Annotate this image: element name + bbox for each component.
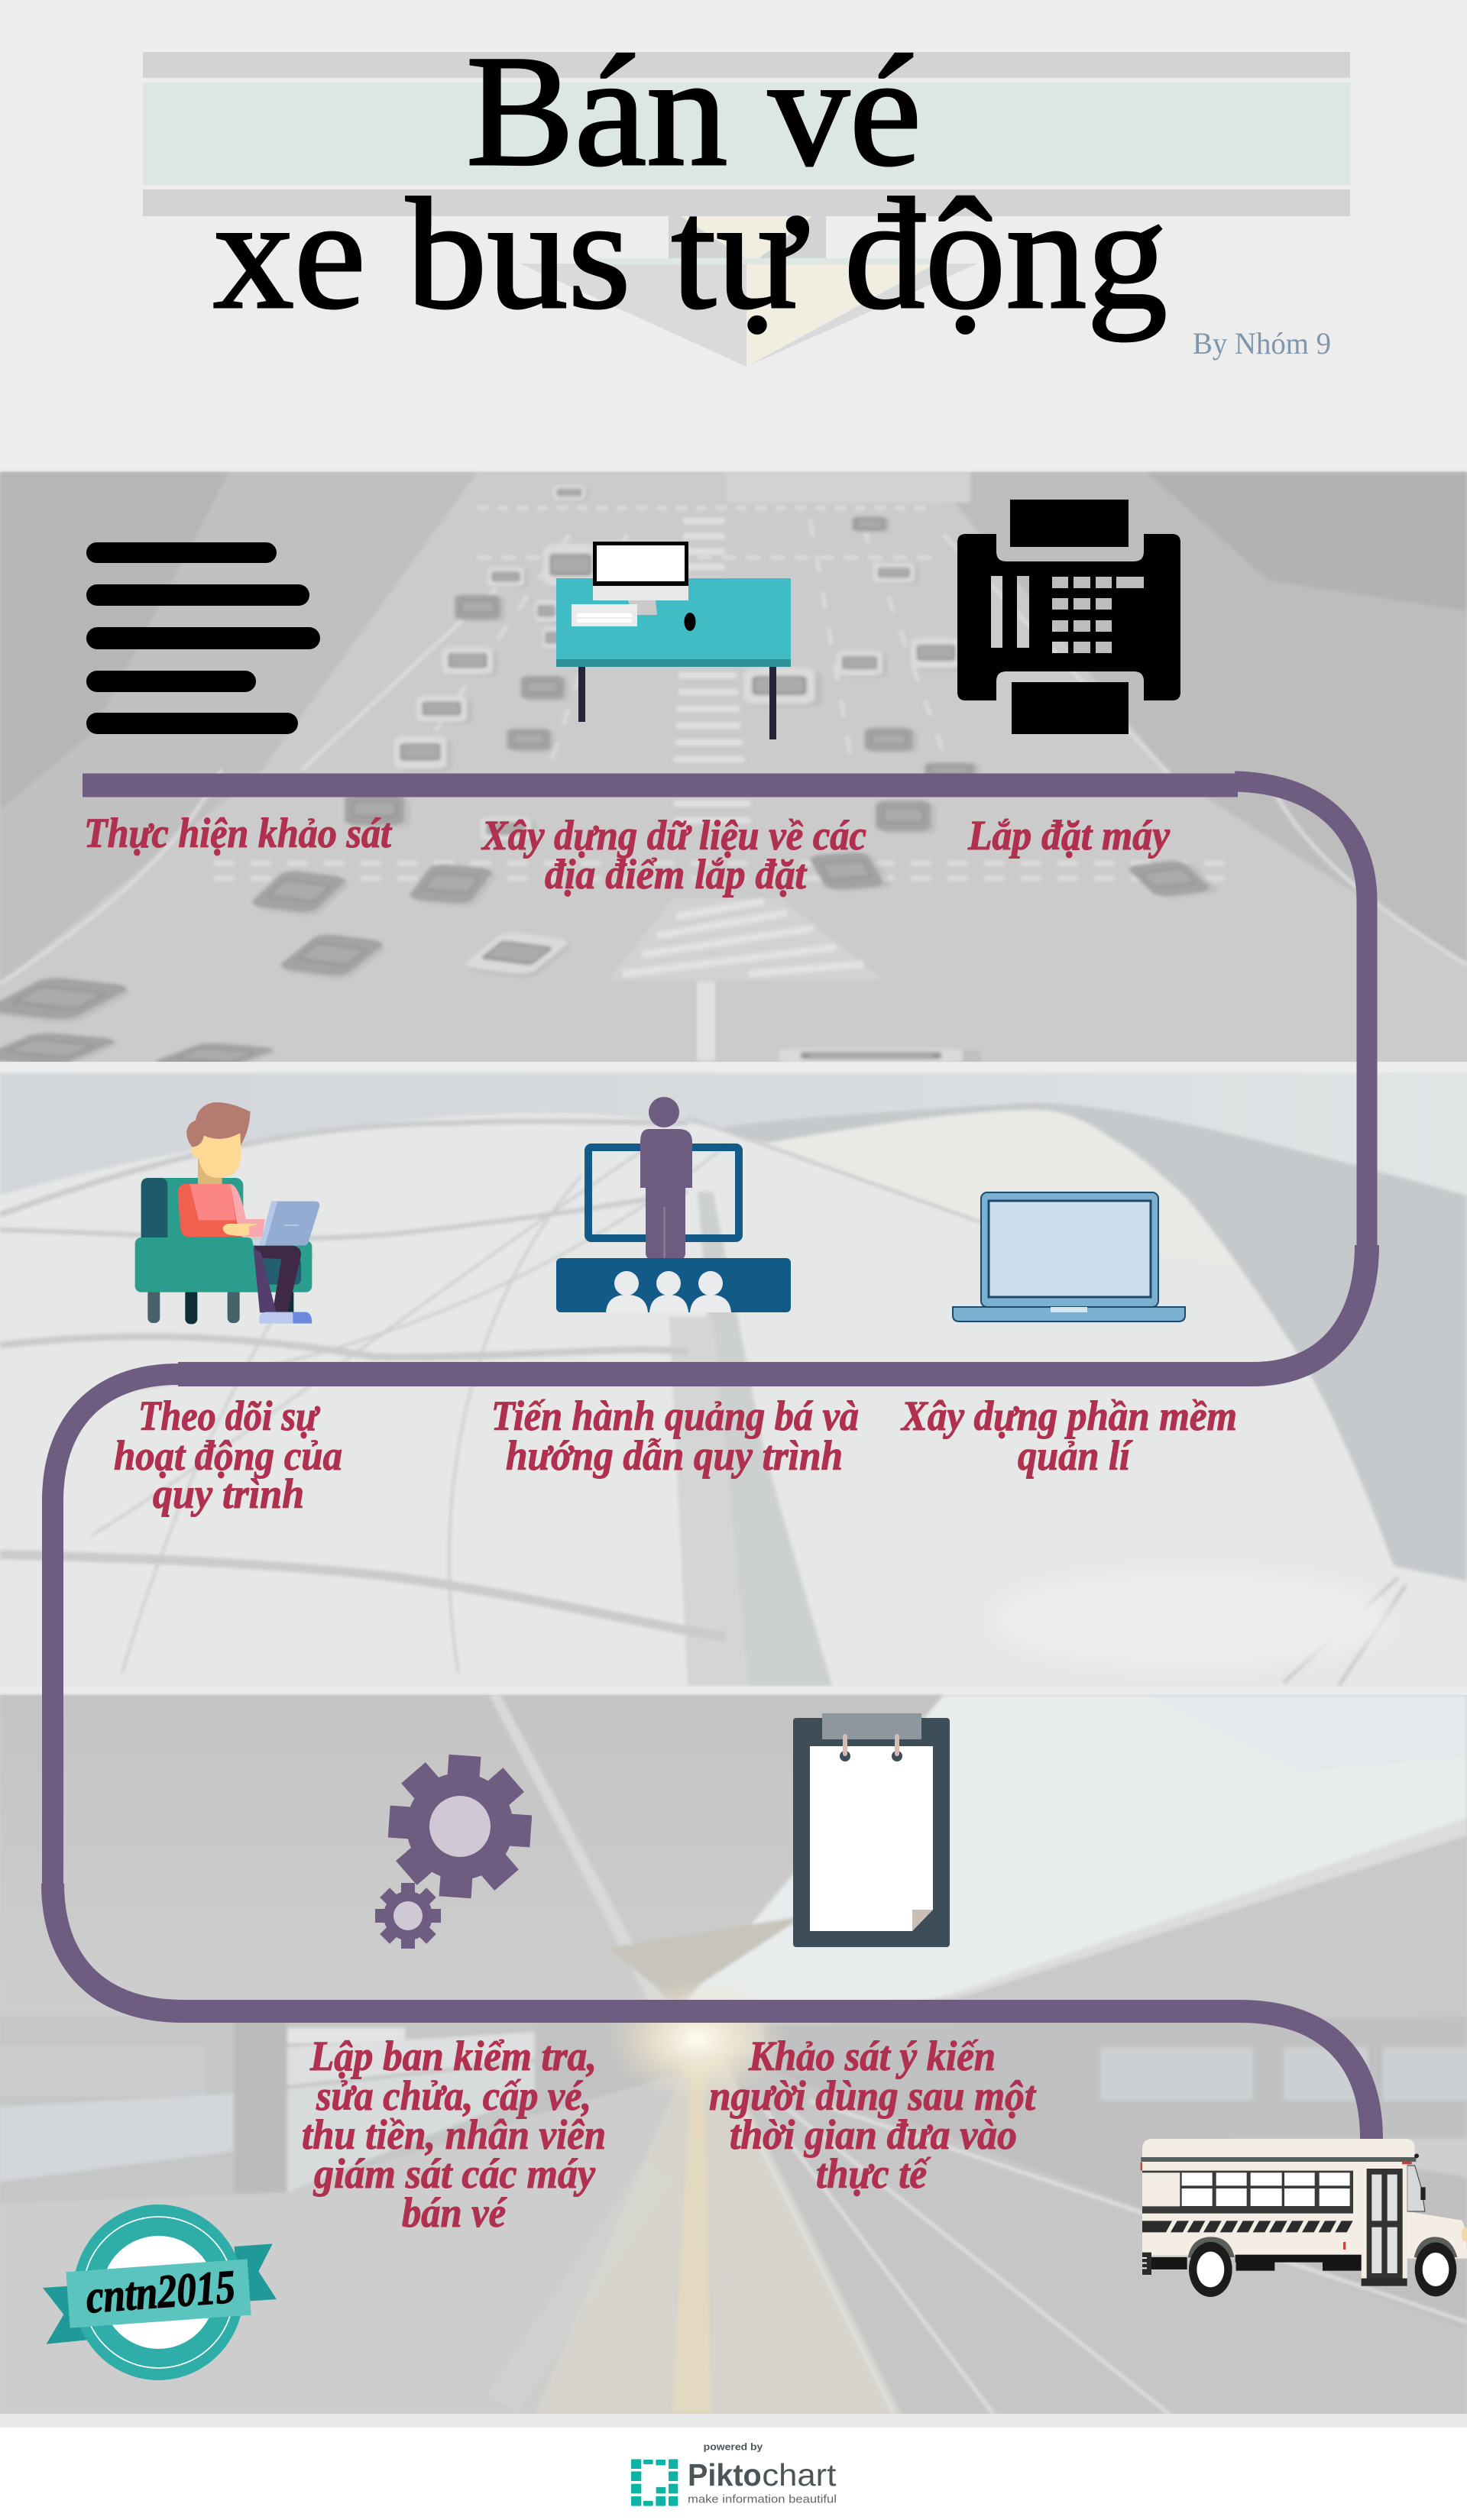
title [213, 23, 1167, 341]
label: step 5 [491, 1393, 859, 1479]
label: step 4 [900, 1393, 1237, 1479]
label: step 8 [302, 2033, 606, 2236]
header banner graphic [143, 52, 1350, 367]
icon: clipboard [793, 1713, 950, 1947]
label: step 8: sửa chửa, cấp vé, [316, 2072, 591, 2119]
divider strip [0, 1062, 1467, 1075]
label: step 1: Thực hiện khảo sát [84, 810, 393, 856]
label: step 2: Xây dựng dữ liệu về các [481, 812, 866, 859]
label: step 7: người dùng sau một [709, 2072, 1037, 2119]
label: step 8: Lập ban kiểm tra, [309, 2033, 597, 2079]
label: step 6 [114, 1393, 342, 1517]
label: step 7: Khảo sát ý kiến [748, 2033, 996, 2079]
label: step 2 [481, 812, 866, 898]
label: step 8: thu tiền, nhân viên [302, 2111, 606, 2158]
icon: fax machine [957, 500, 1180, 734]
label: step 4: quản lí [1018, 1432, 1133, 1479]
icon: badge CNTN2015: cntn2015 [84, 2261, 237, 2324]
label: step 5: Tiến hành quảng bá và [491, 1393, 859, 1439]
label: step 5: hướng dẫn quy trình [506, 1432, 843, 1479]
byline: By Nhóm 9 [1193, 326, 1331, 361]
label: step 7: thực tế [816, 2150, 931, 2197]
label: step 6: quy trình [153, 1470, 304, 1517]
label: step 2: địa điểm lắp đặt [545, 851, 808, 898]
icon: badge CNTN2015 [43, 2205, 277, 2380]
label: step 8: giám sát các máy [313, 2150, 596, 2197]
icon: text lines [86, 542, 320, 734]
footer logo: Piktochart: make information beautiful [688, 2494, 837, 2506]
label: step 3: Lắp đặt máy [967, 812, 1171, 859]
label: step 7 [709, 2033, 1037, 2197]
title: Bán vé [466, 23, 921, 199]
divider strip [0, 1687, 1467, 1695]
footer logo: Piktochart: chart [762, 2457, 836, 2493]
footer logo: Piktochart: powered by [704, 2442, 763, 2453]
icon: presenter and audience [556, 1097, 791, 1312]
footer logo: Piktochart: Pikto [688, 2457, 762, 2493]
icon: desk with computer [556, 542, 791, 739]
footer logo: Piktochart [631, 2442, 837, 2506]
label: step 8: bán vé [402, 2189, 507, 2236]
label: step 7: thời gian đưa vào [730, 2111, 1017, 2158]
icon: gears [375, 1751, 536, 1949]
icon: person with laptop on armchair [135, 1102, 319, 1324]
panel: road photo background [0, 472, 1467, 1072]
label: step 4: Xây dựng phần mềm [900, 1393, 1237, 1439]
title: xe bus tự động [213, 166, 1167, 341]
label: step 6: Theo dõi sự [138, 1393, 321, 1439]
icon: school bus [1141, 2139, 1467, 2297]
label: step 6: hoạt động của [114, 1432, 342, 1479]
footer white area [0, 2428, 1467, 2520]
divider strip [0, 2414, 1467, 2428]
icon: laptop [953, 1192, 1185, 1321]
panel: sail roof photo background [0, 1073, 1467, 1687]
process path [53, 781, 1371, 2139]
panel: train station photo background [0, 1695, 1467, 2414]
